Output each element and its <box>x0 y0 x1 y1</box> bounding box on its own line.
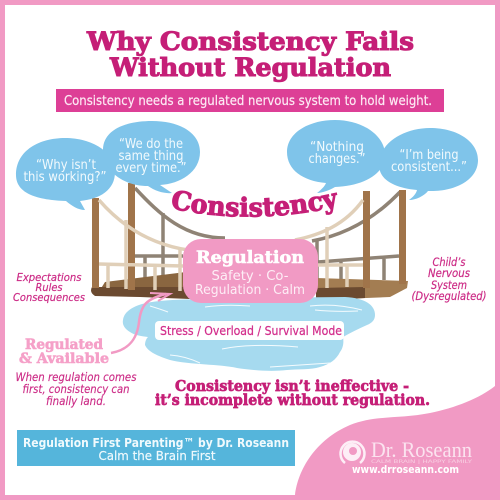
regulation box: Safety · Co- <box>212 268 289 284</box>
logo wordmark: Dr. Roseann <box>371 437 472 462</box>
regulation first note: finally land. <box>46 394 106 408</box>
right label: child's nervous system: Nervous <box>428 266 470 280</box>
stress label: Stress / Overload / Survival Mode <box>160 323 342 338</box>
regulated and available label: Regulated <box>25 337 104 353</box>
logo wordmark: CALM BRAIN | HAPPY FAMILY <box>371 459 473 464</box>
arrow from regulated and available to bridge <box>111 293 170 353</box>
right label: child's nervous system: System <box>431 278 467 292</box>
footer teal banner: Regulation First Parenting™ by Dr. Roseann <box>23 435 289 450</box>
speech bubble: being consistent <box>379 128 478 200</box>
speech bubble: same thing: “We do the <box>119 136 183 152</box>
left label: expectations: Rules <box>36 281 63 294</box>
footer teal banner: Calm the Brain First <box>98 448 216 463</box>
speech bubble: same thing: every time.” <box>116 160 186 176</box>
conclusion text <box>155 378 430 409</box>
left label: expectations: Expectations <box>16 271 82 284</box>
regulation first note <box>16 370 137 408</box>
title <box>86 27 414 82</box>
curved Consistency heading <box>172 190 338 218</box>
regulated and available label: & Available <box>19 351 109 367</box>
stress label <box>155 321 344 340</box>
regulation first note: When regulation comes <box>16 370 137 384</box>
corner wave panel <box>295 386 495 495</box>
water pool <box>123 297 375 371</box>
website: www.drroseann.com <box>352 463 459 476</box>
regulation box <box>183 239 318 303</box>
speech bubble: why <box>16 138 115 210</box>
deck <box>100 272 186 290</box>
back gray ropes and rails <box>135 188 225 238</box>
right label: child's nervous system <box>412 255 486 303</box>
speech bubble: same thing: same thing <box>118 148 184 164</box>
title: Without Regulation <box>109 53 391 82</box>
curved Consistency heading: Consistency <box>172 190 338 218</box>
speech bubble: nothing changes: “Nothing <box>310 139 364 155</box>
subtitle banner <box>56 89 444 112</box>
subtitle banner: Consistency needs a regulated nervous system to hold weight. <box>64 94 432 109</box>
conclusion text: Consistency isn’t ineffective - <box>175 378 409 395</box>
title: Why Consistency Fails <box>86 27 414 56</box>
speech bubble: nothing changes: changes.” <box>308 151 366 167</box>
left label: expectations: Consequences <box>13 291 85 304</box>
speech bubble: being consistent: “I’m being <box>400 147 458 163</box>
speech bubble: being consistent: consistent...” <box>391 159 467 175</box>
right label: child's nervous system: (Dysregulated) <box>412 289 486 303</box>
logo icon <box>341 442 364 463</box>
conclusion text: it’s incomplete without regulation. <box>155 392 430 409</box>
bridge <box>91 183 408 301</box>
speech bubble: why: “Why isn’t <box>36 157 96 173</box>
left label: expectations <box>13 271 85 304</box>
regulation first note: first, consistency can <box>22 382 130 396</box>
front beige ropes and rails <box>99 200 188 250</box>
right label: child's nervous system: Child’s <box>432 255 466 269</box>
posts <box>96 183 402 290</box>
speech bubble: same thing <box>103 121 200 193</box>
water ripples <box>150 305 362 367</box>
regulation box: Regulation <box>196 248 304 268</box>
regulation box: Regulation · Calm <box>195 282 305 298</box>
footer teal banner <box>17 430 295 466</box>
speech bubble: why: this working?” <box>24 169 106 185</box>
speech bubble: nothing changes <box>287 120 385 193</box>
regulated and available label <box>19 337 109 367</box>
